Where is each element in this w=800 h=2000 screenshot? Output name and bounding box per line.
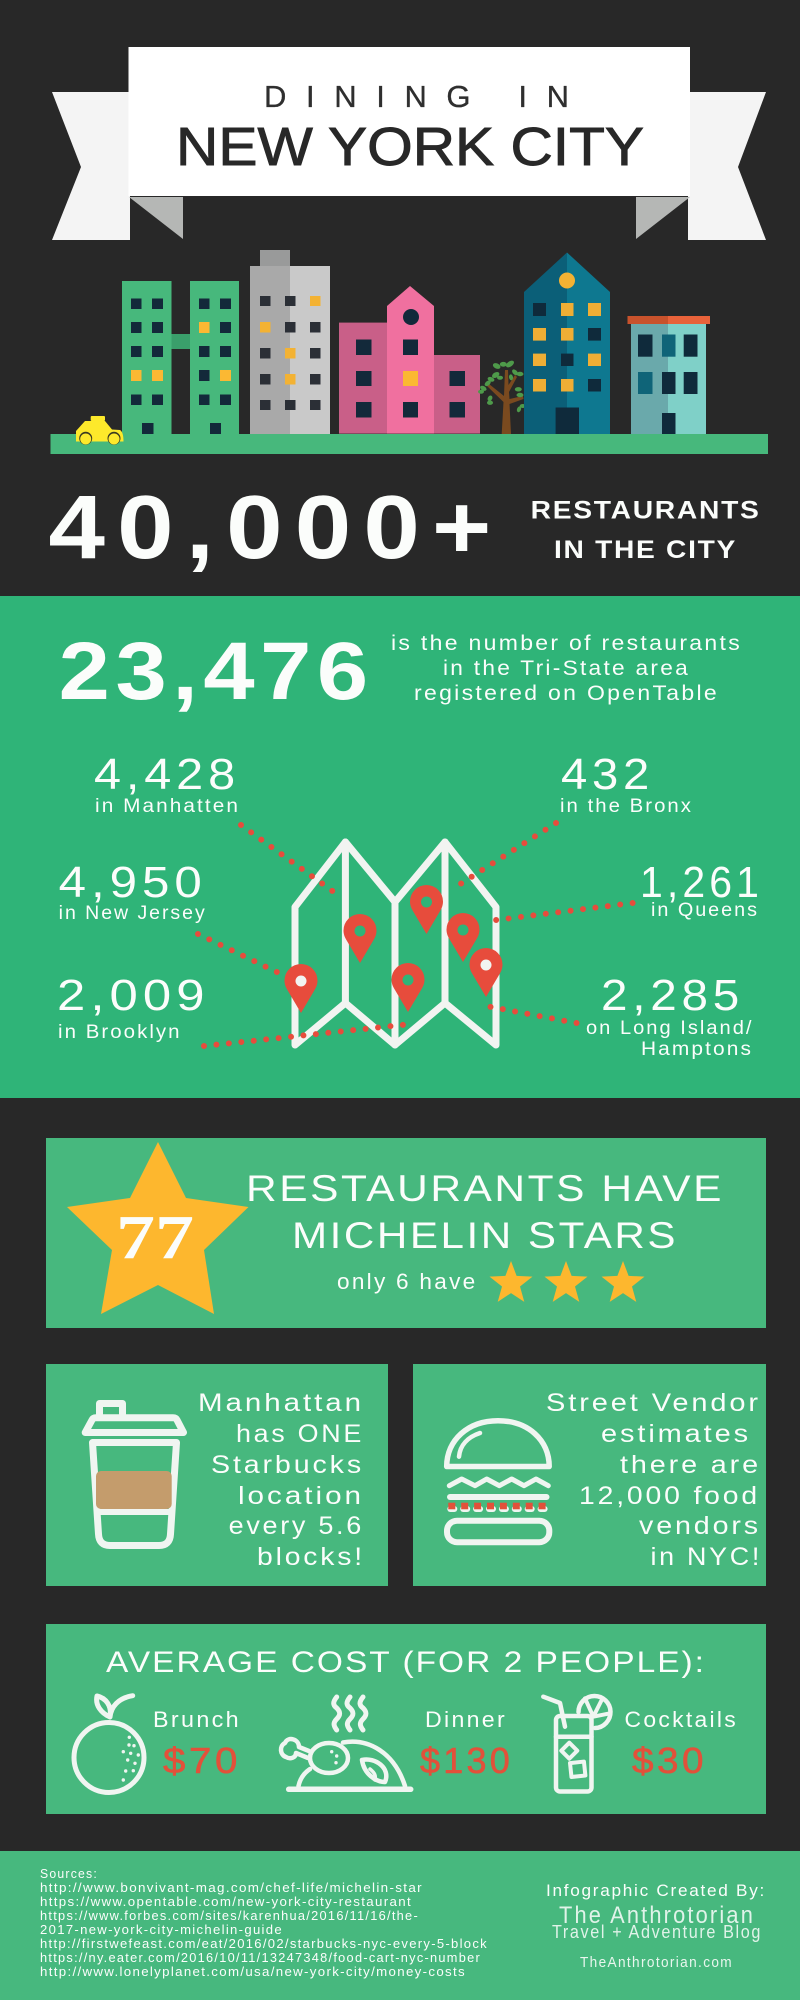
panel: footer <box>0 1851 800 2000</box>
vendor text: Street Vendor <box>546 1389 761 1417</box>
label: Manhattan <box>94 750 240 817</box>
brunch cost <box>153 1707 241 1781</box>
stat: 23,476: in the Tri-State area <box>443 657 690 680</box>
panel: starbucks <box>46 1364 388 1586</box>
stat: 23,476 <box>59 626 742 717</box>
label: Brooklyn: in Brooklyn <box>58 1022 182 1043</box>
label: New Jersey <box>59 858 207 924</box>
dinner cost <box>420 1707 513 1781</box>
starbucks text: blocks! <box>257 1543 365 1571</box>
label: Queens: in Queens <box>651 900 759 921</box>
vendor text: 12,000 food <box>579 1482 760 1510</box>
label: Manhattan: 4,428 <box>94 750 240 799</box>
teal building <box>524 252 610 434</box>
number 77: 77 <box>116 1204 194 1272</box>
label: Bronx <box>560 750 693 817</box>
starbucks text <box>198 1389 365 1571</box>
city skyline illustration <box>50 250 768 454</box>
cocktails cost: Cocktails <box>624 1707 738 1732</box>
starbucks text: location <box>238 1482 364 1510</box>
creator credit: The Anthrotorian <box>559 1902 755 1929</box>
map pins <box>284 885 502 1013</box>
cocktails cost <box>624 1707 738 1781</box>
pink building <box>339 286 480 434</box>
panel: street vendors <box>413 1364 766 1586</box>
sources list: http://www.bonvivant-mag.com/chef-life/michelin-star <box>40 1881 423 1895</box>
three star note: only 6 have <box>337 1269 478 1294</box>
cocktails cost: $30 <box>632 1740 707 1781</box>
label: Bronx: in the Bronx <box>560 796 693 817</box>
starbucks text: Manhattan <box>198 1389 364 1417</box>
stat: 23,476: is the number of restaurants <box>391 632 742 655</box>
icon: orange <box>74 1696 144 1792</box>
headline stat: 40,000+: RESTAURANTS <box>531 497 761 525</box>
sources list <box>40 1867 488 1979</box>
brunch cost: $70 <box>163 1740 241 1781</box>
headline stat: 40,000+: 40,000+ <box>48 478 503 578</box>
sources list: 2017-new-york-city-michelin-guide <box>40 1923 283 1937</box>
starbucks text: has ONE <box>236 1420 364 1448</box>
sources list: https://www.forbes.com/sites/karenhua/2016/11/16/the- <box>40 1909 419 1923</box>
folded map icon <box>295 842 496 1045</box>
vendor text: in NYC! <box>650 1543 762 1571</box>
sources list: Sources: <box>40 1867 98 1881</box>
icon: cocktail <box>543 1696 610 1792</box>
sources list: https://www.opentable.com/new-york-city-restaurant <box>40 1895 412 1909</box>
icon: burger <box>447 1421 549 1542</box>
cost heading: AVERAGE COST (FOR 2 PEOPLE): <box>106 1646 706 1679</box>
creator credit: Infographic Created By: <box>546 1881 766 1900</box>
panel: michelin stars <box>46 1138 766 1328</box>
gray tower <box>250 250 330 434</box>
stat: 23,476: registered on OpenTable <box>414 682 719 705</box>
dotted connector lines <box>198 823 633 1046</box>
dinner cost: $130 <box>420 1740 513 1781</box>
label: Queens: 1,261 <box>640 858 763 907</box>
vendor text: vendors <box>639 1512 761 1540</box>
creator credit: Travel + Adventure Blog <box>552 1922 762 1942</box>
aqua building <box>628 316 710 434</box>
creator credit: TheAnthrotorian.com <box>580 1954 733 1971</box>
title banner <box>52 47 766 240</box>
label: Long Island: Hamptons <box>641 1039 753 1060</box>
label: Manhattan: in Manhatten <box>95 796 240 817</box>
title banner: NEW YORK CITY <box>176 117 644 177</box>
title banner: DINING IN <box>264 79 569 114</box>
label: New Jersey: 4,950 <box>59 858 207 907</box>
label: Long Island: 2,285 <box>601 971 744 1020</box>
label: Bronx: 432 <box>561 750 654 799</box>
icon: roast turkey <box>281 1697 411 1789</box>
stat: 23,476: 23,476 <box>59 626 374 717</box>
yellow taxi <box>76 416 124 445</box>
label: Brooklyn <box>57 971 210 1043</box>
label: New Jersey: in New Jersey <box>59 903 207 924</box>
vendor text: there are <box>620 1451 761 1479</box>
vendor text <box>546 1389 762 1571</box>
sources list: http://firstwefeast.com/eat/2016/02/starbucks-nyc-every-5-block <box>40 1937 488 1951</box>
vendor text: estimates <box>601 1420 751 1448</box>
label: Long Island: on Long Island/ <box>586 1018 754 1039</box>
headline stat: 40,000+ <box>48 478 761 578</box>
headline stat: 40,000+: IN THE CITY <box>554 536 737 564</box>
panel: average cost <box>46 1624 766 1814</box>
sources list: https://ny.eater.com/2016/10/11/13247348/food-cart-nyc-number <box>40 1951 481 1965</box>
starbucks text: Starbucks <box>211 1451 364 1479</box>
label: Long Island <box>586 971 754 1060</box>
icon: coffee cup <box>85 1404 184 1546</box>
green twin towers <box>122 281 239 434</box>
dinner cost: Dinner <box>425 1707 507 1732</box>
tree <box>478 359 526 434</box>
label: Brooklyn: 2,009 <box>57 971 210 1020</box>
icon: large star <box>67 1142 248 1314</box>
creator credit <box>546 1881 766 1971</box>
ground strip <box>50 434 768 454</box>
michelin heading: MICHELIN STARS <box>292 1215 678 1256</box>
michelin heading <box>246 1168 724 1256</box>
michelin heading: RESTAURANTS HAVE <box>246 1168 724 1209</box>
starbucks text: every 5.6 <box>229 1512 364 1540</box>
sources list: http://www.lonelyplanet.com/usa/new-york-city/money-costs <box>40 1965 466 1979</box>
panel: tri-state restaurants <box>0 596 800 1098</box>
three star note <box>337 1261 644 1302</box>
brunch cost: Brunch <box>153 1707 241 1732</box>
